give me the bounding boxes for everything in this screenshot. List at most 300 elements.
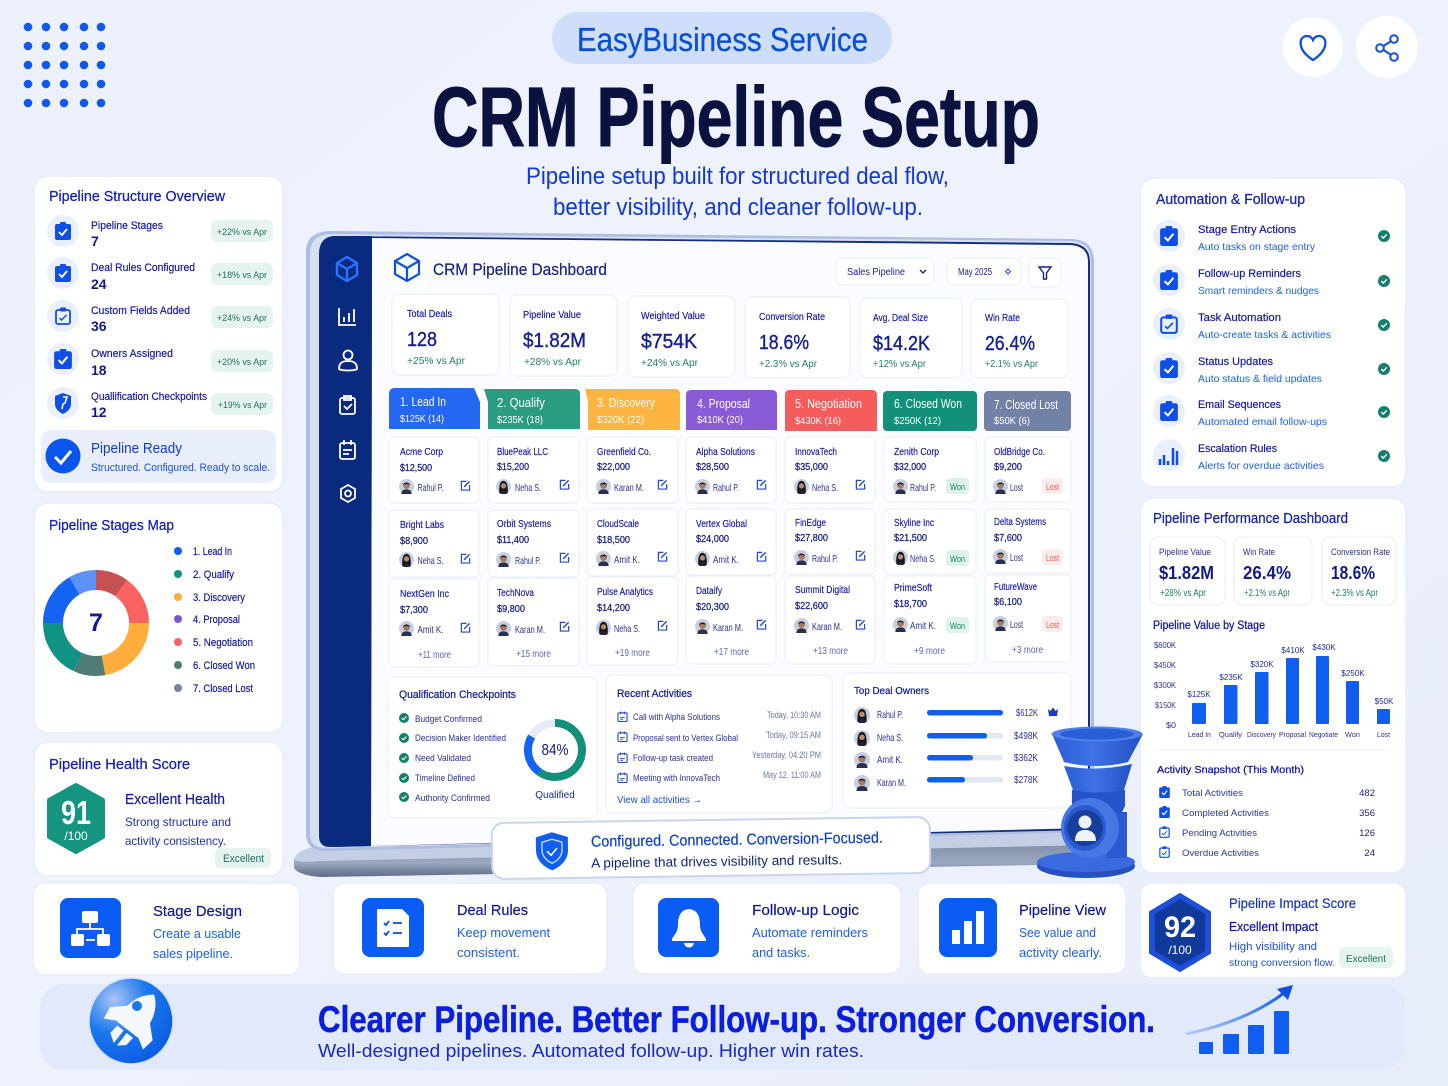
row: custom fields added xyxy=(47,300,273,334)
owner: rahul: Rahul P. xyxy=(877,709,903,721)
deal column: proposal: $20,300 xyxy=(696,601,729,613)
tile: pipeline impact score: Pipeline Impact Score xyxy=(1229,896,1356,911)
legend: 3. Discovery xyxy=(193,592,245,604)
banner: closing message: Clearer Pipeline. Better Follow-up. Stronger Conversion. xyxy=(318,999,1155,1040)
stage header: qualify: $235K (18) xyxy=(497,414,543,426)
icon: cube nav xyxy=(337,257,357,281)
deal column: negotiation: +13 more xyxy=(813,646,848,657)
icon: clipboard nav xyxy=(340,396,355,414)
deal column: discovery: $18,500 xyxy=(597,534,630,546)
checklist: Timeline Defined xyxy=(415,773,475,784)
panel: pipeline stages map xyxy=(34,503,283,733)
deal column: proposal: $24,000 xyxy=(696,533,729,545)
decorative dot grid xyxy=(24,23,105,107)
row: email sequences: Email Sequences xyxy=(1198,399,1281,411)
badge: 92 of 100: 92 xyxy=(1164,911,1196,944)
deal column: closed lost: FutureWave xyxy=(994,582,1037,593)
kpi: weighted value: Weighted Value xyxy=(641,311,705,322)
ring chart: 84 percent qualified: Qualified xyxy=(535,790,575,801)
bar chart: $0 xyxy=(1166,721,1177,730)
pill: excellent: Excellent xyxy=(1346,953,1386,965)
bar chart: $150K xyxy=(1155,701,1177,710)
row: stage entry actions: Auto tasks on stage entry xyxy=(1198,241,1316,253)
deal column: closed won: Won xyxy=(950,554,965,564)
deal column: closed lost: OldBridge Co. xyxy=(994,447,1045,458)
kpi: average deal size: Avg. Deal Size xyxy=(873,313,928,324)
activity snapshot: Total Activities xyxy=(1182,788,1243,799)
tile: follow-up logic: and tasks. xyxy=(752,946,810,960)
deal column: closed won: Won xyxy=(950,621,965,631)
deal column: lead in xyxy=(389,437,479,667)
badge: 91 of 100: /100 xyxy=(64,829,88,843)
pill: excellent xyxy=(1339,947,1393,968)
activity snapshot: 24 xyxy=(1364,848,1375,859)
status: pipeline ready: Pipeline Ready xyxy=(91,440,182,457)
tile: deal rules: Keep movement xyxy=(457,926,551,940)
stage header: proposal xyxy=(686,390,777,430)
stage header: closed lost: 7. Closed Lost xyxy=(994,398,1058,412)
deal column: proposal xyxy=(686,437,776,664)
row: qualification checkpoints: Quallification Checkpoints xyxy=(91,391,207,403)
deal column: negotiation: $35,000 xyxy=(795,461,828,473)
kpi: total deals: 128 xyxy=(407,329,437,351)
panel: top deal owners xyxy=(843,673,1071,808)
deal column: proposal: Dataify xyxy=(696,586,722,597)
kpi: conversion rate: +2.3% vs Apr xyxy=(1331,587,1378,599)
banner: closing message xyxy=(40,978,1405,1070)
subtitle: Pipeline setup built for structured deal flow, xyxy=(526,163,949,190)
checklist: Need Validated xyxy=(415,753,471,764)
activity list: Today, 10:30 AM xyxy=(767,710,821,720)
bar chart: $410K xyxy=(1281,646,1305,655)
deal column: negotiation: $22,600 xyxy=(795,600,828,612)
panel: recent activities: Recent Activities xyxy=(617,688,692,700)
stage header: qualify xyxy=(484,389,580,429)
kpi: total deals: Total Deals xyxy=(407,309,452,320)
deal column: discovery: $14,200 xyxy=(597,602,630,614)
tile: pipeline view: activity clearly. xyxy=(1019,946,1102,960)
dashboard header: CRM Pipeline Dashboard xyxy=(433,260,607,279)
stage header: closed lost: $50K (6) xyxy=(994,415,1030,427)
bar chart: Lead In xyxy=(1188,730,1211,739)
tile: stage design: Stage Design xyxy=(153,903,242,920)
activity list: May 12, 11:00 AM xyxy=(763,770,821,780)
deal column: closed won: Zenith Corp xyxy=(894,447,939,458)
kpi: pipeline value xyxy=(1150,537,1225,605)
row: owners assigned: Owners Assigned xyxy=(91,348,173,360)
deal column: lead in: $7,300 xyxy=(400,604,428,616)
deal column: qualify: Neha S. xyxy=(515,482,541,494)
stage header: closed won: 6. Closed Won xyxy=(894,397,962,411)
tile: stage design xyxy=(33,883,300,975)
stage header: negotiation: 5. Negotiation xyxy=(795,397,862,411)
activity list: Proposal sent to Vertex Global xyxy=(633,733,738,744)
icon: filter button xyxy=(1029,258,1061,287)
deal column: qualify xyxy=(488,437,579,666)
kpi: conversion rate xyxy=(745,297,850,378)
deal column: closed lost: Lost xyxy=(1046,553,1059,563)
heading: Pipeline Structure Overview xyxy=(49,188,225,205)
kpi: pipeline value: $1.82M xyxy=(1159,563,1214,583)
deal column: negotiation: Rahul P. xyxy=(812,553,838,565)
callout: configured connected conversion-focused: A pipeline that drives visibility and results. xyxy=(591,852,842,871)
kpi: pipeline value xyxy=(510,295,617,376)
bar chart: $300K xyxy=(1154,681,1177,690)
panel: top deal owners: Top Deal Owners xyxy=(854,685,929,697)
deal column: closed won: PrimeSoft xyxy=(894,583,932,594)
kpi: conversion rate: 18.6% xyxy=(1331,563,1375,583)
tile: deal rules: consistent. xyxy=(457,946,520,960)
stage header: qualify: 2. Qualify xyxy=(497,396,546,410)
deal column: closed lost: $7,600 xyxy=(994,532,1022,544)
stage header: closed lost xyxy=(984,391,1071,431)
icon: document checklist xyxy=(362,898,424,957)
kpi: average deal size: $14.2K xyxy=(873,333,931,355)
kpi: pipeline value: +28% vs Apr xyxy=(1160,587,1206,599)
deal column: lead in: Bright Labs xyxy=(400,520,444,531)
deal column: discovery: CloudScale xyxy=(597,519,639,530)
row: status updates: Status Updates xyxy=(1198,356,1273,368)
deal column: qualify: Karan M. xyxy=(515,624,545,636)
health description: Strong structure and xyxy=(125,815,231,829)
deal column: lead in: Rahul P. xyxy=(418,482,444,494)
deal column: closed won: $18,700 xyxy=(894,598,927,610)
deal column: negotiation: Karan M. xyxy=(812,621,842,633)
bar chart: $125K xyxy=(1187,690,1211,699)
deal column: discovery: Karan M. xyxy=(614,482,644,494)
row: follow-up reminders: Smart reminders & nudges xyxy=(1198,285,1319,297)
stage header: discovery: $320K (22) xyxy=(597,414,644,426)
kpi: pipeline value: +28% vs Apr xyxy=(524,356,581,368)
deal column: negotiation: InnovaTech xyxy=(795,447,837,458)
deal column: closed won: Skyline Inc xyxy=(894,518,934,529)
deal column: qualify: TechNova xyxy=(497,588,534,599)
legend: 5. Negotiation xyxy=(193,637,253,649)
deal column: negotiation: Summit Digital xyxy=(795,585,850,596)
badge: 92 of 100 xyxy=(1150,894,1210,971)
row: status updates: Auto status & field updates xyxy=(1198,373,1322,385)
stage header: lead in: $125K (14) xyxy=(400,413,444,425)
icon: cube logo xyxy=(395,254,419,281)
panel: qualification checkpoints: Qualification Checkpoints xyxy=(399,689,516,701)
deal column: discovery: Pulse Analytics xyxy=(597,587,653,598)
deal column: closed lost: $6,100 xyxy=(994,596,1022,608)
row: pipeline stages: 7 xyxy=(91,233,99,249)
row: stage entry actions: Stage Entry Actions xyxy=(1198,224,1297,236)
deal column: lead in: Acme Corp xyxy=(400,447,443,458)
pill: excellent xyxy=(215,848,271,868)
deal column: discovery: +19 more xyxy=(615,648,650,659)
activity list: Today, 09:15 AM xyxy=(766,730,821,740)
row: escalation rules: Escalation Rules xyxy=(1198,443,1277,455)
deal column: closed lost: Lost xyxy=(1010,619,1023,631)
deal column: qualify: Orbit Systems xyxy=(497,519,551,530)
stage header: closed won: $250K (12) xyxy=(894,415,941,427)
tile: pipeline view: See value and xyxy=(1019,926,1096,940)
monitor base xyxy=(294,829,1100,877)
deal column: lead in: +11 more xyxy=(418,650,451,661)
donut chart xyxy=(53,580,139,666)
deal column: closed won: Neha S. xyxy=(910,553,936,565)
deal column: discovery: Amit K. xyxy=(614,554,640,566)
deal column: closed won: Won xyxy=(950,482,965,492)
icon: settings nav xyxy=(341,485,355,502)
deal column: closed won: $32,000 xyxy=(894,461,926,473)
row: qualification checkpoints: 12 xyxy=(91,404,107,420)
checklist: Authority Confirmed xyxy=(415,793,490,804)
panel: pipeline performance dashboard xyxy=(1140,498,1406,873)
bar chart: Qualify xyxy=(1219,730,1242,739)
brand pill: EasyBusiness Service xyxy=(577,21,868,58)
icon: chart nav xyxy=(339,308,356,325)
row: deal rules configured xyxy=(47,257,273,292)
kpi: win rate xyxy=(971,299,1068,378)
panel: automation and follow-up xyxy=(1140,178,1406,487)
stage header: discovery xyxy=(585,389,680,430)
deal column: closed won: +9 more xyxy=(914,646,945,657)
kpi: pipeline value: Pipeline Value xyxy=(1159,547,1211,558)
callout: configured connected conversion-focused xyxy=(492,817,930,879)
kpi: conversion rate: 18.6% xyxy=(759,332,809,354)
row: pipeline stages xyxy=(47,215,273,249)
owner: karan xyxy=(854,774,1038,791)
tile: pipeline impact score: Excellent Impact xyxy=(1229,920,1318,934)
row: qualification checkpoints: +19% vs Apr xyxy=(218,400,267,411)
kpi: win rate: +2.1% vs Apr xyxy=(1244,587,1290,599)
row: deal rules configured: Deal Rules Configured xyxy=(91,262,195,274)
deal column: closed lost: Lost xyxy=(1046,620,1059,630)
tile: follow-up logic: Automate reminders xyxy=(752,926,868,940)
activity list: Yesterday, 04:20 PM xyxy=(752,750,821,760)
monitor frame xyxy=(306,231,1094,851)
deal column: qualify: $15,200 xyxy=(497,461,529,473)
kpi: conversion rate: Conversion Rate xyxy=(1331,547,1390,558)
stage header: negotiation: $430K (16) xyxy=(795,415,841,427)
deal column: negotiation: $27,800 xyxy=(795,532,828,544)
deal column: discovery xyxy=(587,437,678,665)
deal column: closed lost: Lost xyxy=(1046,482,1059,492)
row: custom fields added: 36 xyxy=(91,318,107,334)
deal column: closed won xyxy=(884,437,976,664)
deal column: discovery: $22,000 xyxy=(597,461,630,473)
deal column: proposal: $28,500 xyxy=(696,461,729,473)
icon: heart button xyxy=(1283,17,1343,77)
row: email sequences xyxy=(1153,395,1390,428)
owner: neha xyxy=(854,730,1038,746)
activity snapshot: Pending Activities xyxy=(1182,828,1257,839)
bar chart: Negotiate xyxy=(1309,730,1338,739)
row: owners assigned xyxy=(47,343,273,378)
filter: month xyxy=(947,258,1021,285)
deal column: negotiation: Neha S. xyxy=(812,482,838,494)
tile: stage design: sales pipeline. xyxy=(153,947,233,961)
bar chart: $430K xyxy=(1312,643,1336,652)
deal column: closed lost: Lost xyxy=(1010,482,1023,494)
icon: share button xyxy=(1356,16,1418,78)
bar chart: $250K xyxy=(1341,669,1365,678)
deal column: closed lost xyxy=(985,437,1071,662)
heading: Pipeline Health Score xyxy=(49,756,190,773)
health description xyxy=(125,792,231,848)
activity snapshot: Activity Snapshot (This Month) xyxy=(1157,764,1304,776)
bar chart: $600K xyxy=(1154,641,1177,650)
activity snapshot: Completed Activities xyxy=(1182,808,1269,819)
tile: pipeline impact score: strong conversion flow. xyxy=(1229,957,1335,969)
activity snapshot: 482 xyxy=(1359,788,1375,799)
deal column: closed lost: $9,200 xyxy=(994,461,1022,473)
icon: bar chart xyxy=(939,898,997,957)
link: view all activities: View all activities → xyxy=(617,794,702,806)
subtitle: better visibility, and cleaner follow-up. xyxy=(553,194,923,221)
row: deal rules configured: 24 xyxy=(91,276,107,292)
kpi: win rate: 26.4% xyxy=(985,333,1035,355)
deal column: lead in: NextGen Inc xyxy=(400,589,449,600)
tile: pipeline impact score: High visibility and xyxy=(1229,941,1317,953)
kpi: win rate xyxy=(1234,537,1312,605)
activity snapshot: Overdue Activities xyxy=(1182,848,1259,859)
ring chart: 84 percent qualified: 84% xyxy=(542,742,569,759)
status: pipeline ready: Structured. Configured. Ready to scale. xyxy=(91,462,270,474)
stage header: closed won xyxy=(883,391,977,431)
heading: Automation & Follow-up xyxy=(1156,191,1305,208)
screen xyxy=(371,238,1088,846)
deal column: proposal: Karan M. xyxy=(713,622,743,634)
legend: 7. Closed Lost xyxy=(193,683,253,695)
deal column: proposal: Amit K. xyxy=(713,554,739,566)
banner: closing message: Well-designed pipelines. Automated follow-up. Higher win rates. xyxy=(318,1040,864,1061)
tile: pipeline impact score xyxy=(1140,883,1406,978)
row: pipeline stages: Pipeline Stages xyxy=(91,220,163,232)
owner: amit xyxy=(854,752,1038,768)
icon: calendar nav xyxy=(340,440,355,459)
activity list xyxy=(618,710,821,784)
icon: flow chart xyxy=(60,898,121,958)
filter: sales pipeline xyxy=(836,258,934,285)
row: stage entry actions xyxy=(1153,220,1390,253)
icon: growth chart with arrow xyxy=(1186,985,1293,1054)
row: custom fields added: +24% vs Apr xyxy=(217,313,267,324)
activity list: Follow-up task created xyxy=(633,753,713,764)
deal column: discovery: Neha S. xyxy=(614,623,640,635)
kpi: average deal size: +12% vs Apr xyxy=(873,358,926,370)
tile: deal rules xyxy=(333,883,607,974)
deal column: lead in: Neha S. xyxy=(418,555,444,567)
owner: karan: $278K xyxy=(1014,774,1038,786)
kpi: win rate: Win Rate xyxy=(1243,547,1275,558)
deal column: lead in: Amit K. xyxy=(418,624,444,636)
deal column: closed won: Amit K. xyxy=(910,620,936,632)
deal column: qualify: $9,800 xyxy=(497,603,525,615)
checklist: Decision Maker Identified xyxy=(415,733,506,744)
owner: rahul xyxy=(854,707,1058,723)
deal column: negotiation: FinEdge xyxy=(795,518,826,529)
title: CRM Pipeline Setup xyxy=(432,70,1040,164)
stage header: lead in xyxy=(389,388,480,429)
stage header: discovery: 3. Discovery xyxy=(597,396,656,410)
icon: rocket xyxy=(89,978,175,1064)
pill: excellent: Excellent xyxy=(223,853,264,865)
row: task automation: Task Automation xyxy=(1198,312,1281,324)
chart heading: Pipeline Value by Stage xyxy=(1153,620,1265,632)
kpi: conversion rate xyxy=(1322,537,1396,605)
deal column: negotiation xyxy=(785,437,875,664)
deal column: closed won: $21,500 xyxy=(894,532,927,544)
owner: amit: $362K xyxy=(1014,752,1038,764)
deal column: closed lost: +3 more xyxy=(1012,645,1043,656)
legend: 6. Closed Won xyxy=(193,660,255,672)
tile: follow-up logic: Follow-up Logic xyxy=(752,902,859,919)
dashboard header xyxy=(395,254,1061,287)
stage header: proposal: 4. Proposal xyxy=(697,397,750,411)
stage header: negotiation xyxy=(785,390,877,431)
legend: 2. Qualify xyxy=(193,569,234,581)
tile: follow-up logic xyxy=(633,883,901,974)
activity snapshot: 126 xyxy=(1359,828,1375,839)
kpi: win rate: Win Rate xyxy=(985,313,1020,324)
legend: 1. Lead In xyxy=(193,546,232,558)
activity snapshot xyxy=(1157,764,1375,859)
deal column: proposal: +17 more xyxy=(714,647,749,658)
bar chart: $50K xyxy=(1375,697,1394,706)
deal column: qualify: +15 more xyxy=(516,649,551,660)
icon: user nav xyxy=(339,350,357,370)
owner: rahul: $612K xyxy=(1016,707,1038,719)
deal column: closed lost: Delta Systems xyxy=(994,517,1046,528)
kpi: win rate: +2.1% vs Apr xyxy=(985,358,1038,370)
brand pill xyxy=(552,12,892,64)
badge: 92 of 100: /100 xyxy=(1168,943,1192,957)
kpi: total deals xyxy=(392,294,499,375)
row: task automation: Auto-create tasks & activities xyxy=(1198,329,1331,341)
row: email sequences: Automated email follow-ups xyxy=(1198,416,1327,428)
tile: pipeline view: Pipeline View xyxy=(1019,902,1106,919)
kpi: conversion rate: +2.3% vs Apr xyxy=(759,358,817,370)
ring chart: 84 percent qualified xyxy=(528,723,582,801)
row: escalation rules xyxy=(1153,439,1390,472)
heading: Pipeline Stages Map xyxy=(49,517,174,534)
tile: pipeline view xyxy=(918,883,1126,974)
icon: shield xyxy=(536,832,568,870)
deal column: proposal: Vertex Global xyxy=(696,519,747,530)
legend xyxy=(174,546,255,695)
deal column: proposal: Alpha Solutions xyxy=(696,447,755,458)
deal column: lead in: $8,900 xyxy=(400,535,428,547)
row: deal rules configured: +18% vs Apr xyxy=(217,270,267,281)
bar chart: Discovery xyxy=(1247,730,1276,739)
activity list: Meeting with InnovaTech xyxy=(633,773,720,784)
row: status updates xyxy=(1153,352,1390,385)
panel: pipeline health score xyxy=(34,742,283,876)
callout: configured connected conversion-focused: Configured. Connected. Conversion-Focused. xyxy=(591,830,883,851)
kpi: weighted value xyxy=(628,296,735,377)
row: follow-up reminders xyxy=(1153,264,1390,297)
owner: karan: Karan M. xyxy=(877,777,906,789)
bar chart xyxy=(1154,641,1394,739)
deal column: discovery: Greenfield Co. xyxy=(597,447,651,458)
icon: bell xyxy=(658,898,719,957)
deal column: qualify: $11,400 xyxy=(497,534,529,546)
row: follow-up reminders: Follow-up Reminders xyxy=(1198,268,1301,280)
panel: recent activities xyxy=(606,675,832,813)
row: custom fields added: Custom Fields Added xyxy=(91,305,190,317)
kpi: weighted value: +24% vs Apr xyxy=(641,357,698,369)
deal column: proposal: Rahul P. xyxy=(713,482,739,494)
checklist: Budget Confirmed xyxy=(415,714,482,725)
kpi: pipeline value: $1.82M xyxy=(523,330,586,352)
row: pipeline stages: +22% vs Apr xyxy=(217,227,267,238)
health description: activity consistency. xyxy=(125,834,226,848)
bar chart: $235K xyxy=(1219,673,1243,682)
